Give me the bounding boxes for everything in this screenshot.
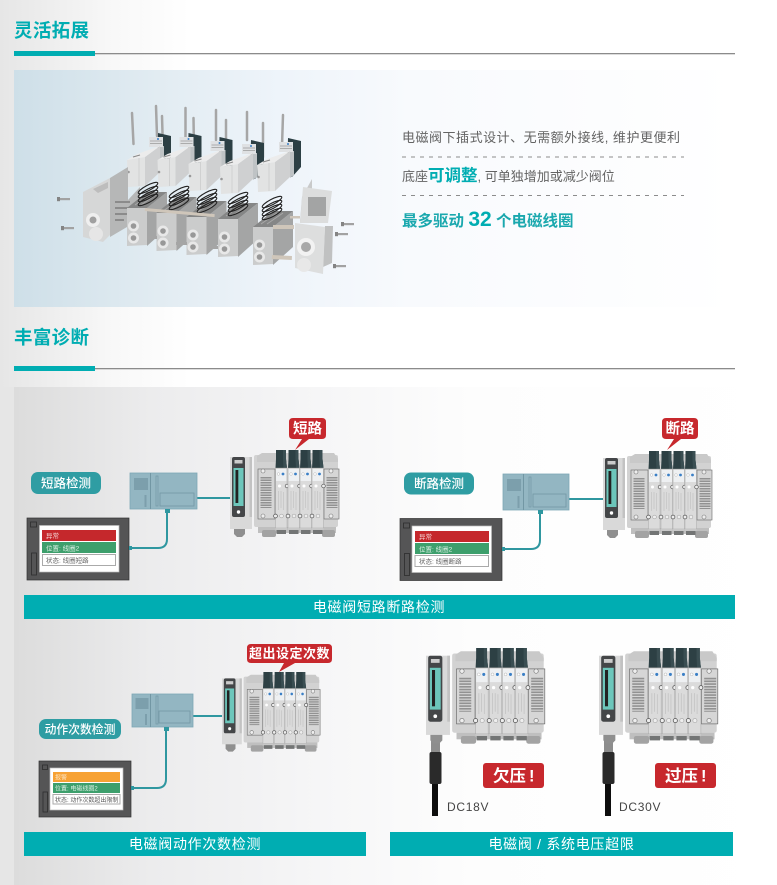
banner: actuation count detection: 电磁阀动作次数检测 [129,836,261,852]
banner: voltage out of limit [390,832,733,856]
label: DC30V: DC30V [619,800,661,814]
heading: flexible expansion [14,20,735,56]
alert: over set count: 超出设定次数 [249,646,330,661]
banner: actuation count detection [24,832,366,856]
valve manifold [603,451,712,538]
heading: flexible expansion: 灵活拓展 [14,20,89,41]
alert: overvoltage [655,763,716,788]
panel: open circuit detection [400,418,712,580]
pill: open circuit detection: 断路检测 [414,476,464,491]
heading: rich diagnostics [14,327,735,371]
alert: open circuit [662,418,698,450]
PLC controller [503,474,569,514]
HMI screen [39,761,134,817]
valve manifold [230,450,339,537]
power cable [602,740,614,816]
pill: open circuit detection [404,472,474,494]
HMI screen: 状态: 线圈短路 [46,556,89,564]
panel: flexible expansion [14,70,735,307]
pill: short circuit detection [31,472,101,494]
alert: short circuit: 短路 [293,420,322,438]
HMI screen: 位置: 线圈2 [46,544,80,552]
alert: undervoltage: 欠压! [493,766,534,786]
valve manifold [426,648,545,744]
alert: over set count [247,644,332,672]
HMI screen: 状态: 动作次数超出限制 [55,796,118,804]
panel: short circuit detection [27,418,339,580]
HMI screen: 异常 [419,532,432,541]
valve manifold [599,648,718,744]
alert: overvoltage: 过压! [665,766,706,786]
alert: undervoltage [483,763,544,788]
text: feature line one: 电磁阀下插式设计、无需额外接线, 维护更便利 [402,130,680,145]
alert: open circuit: 断路 [666,420,695,438]
banner: short and open circuit detection: 电磁阀短路断路检测 [313,599,445,615]
PLC controller [132,694,193,731]
banner: short and open circuit detection [24,595,735,619]
banner: voltage out of limit: 电磁阀 / 系统电压超限 [488,836,635,852]
HMI screen: 位置: 电磁线圈2 [55,784,98,792]
HMI screen [400,518,505,580]
HMI screen [27,518,132,580]
pill: actuation count detection [39,719,121,739]
HMI screen: 位置: 线圈2 [419,544,453,554]
HMI screen: 报警 [55,774,67,782]
panel: actuation count detection [39,644,332,817]
PLC controller [130,473,197,513]
heading: rich diagnostics: 丰富诊断 [14,327,89,348]
valve manifold [222,672,320,752]
panel: overvoltage DC30V [599,648,718,816]
pill: short circuit detection: 短路检测 [41,476,91,490]
connection cables [502,499,603,549]
HMI screen: 异常 [46,531,59,540]
text: feature line three: 最多驱动 32 个电磁线圈 [402,208,573,231]
illustration: exploded valve manifold [57,106,354,274]
connection cables [131,716,222,788]
text: feature line two: 底座可调整, 可单独增加或减少阀位 [402,166,615,185]
panel: undervoltage DC18V [426,648,545,816]
pill: actuation count detection: 动作次数检测 [45,722,116,736]
HMI screen: 状态: 线圈断路 [419,556,462,566]
connection cables [129,498,230,548]
alert: short circuit [289,418,326,450]
label: DC18V: DC18V [447,800,489,814]
power cable [430,740,442,816]
